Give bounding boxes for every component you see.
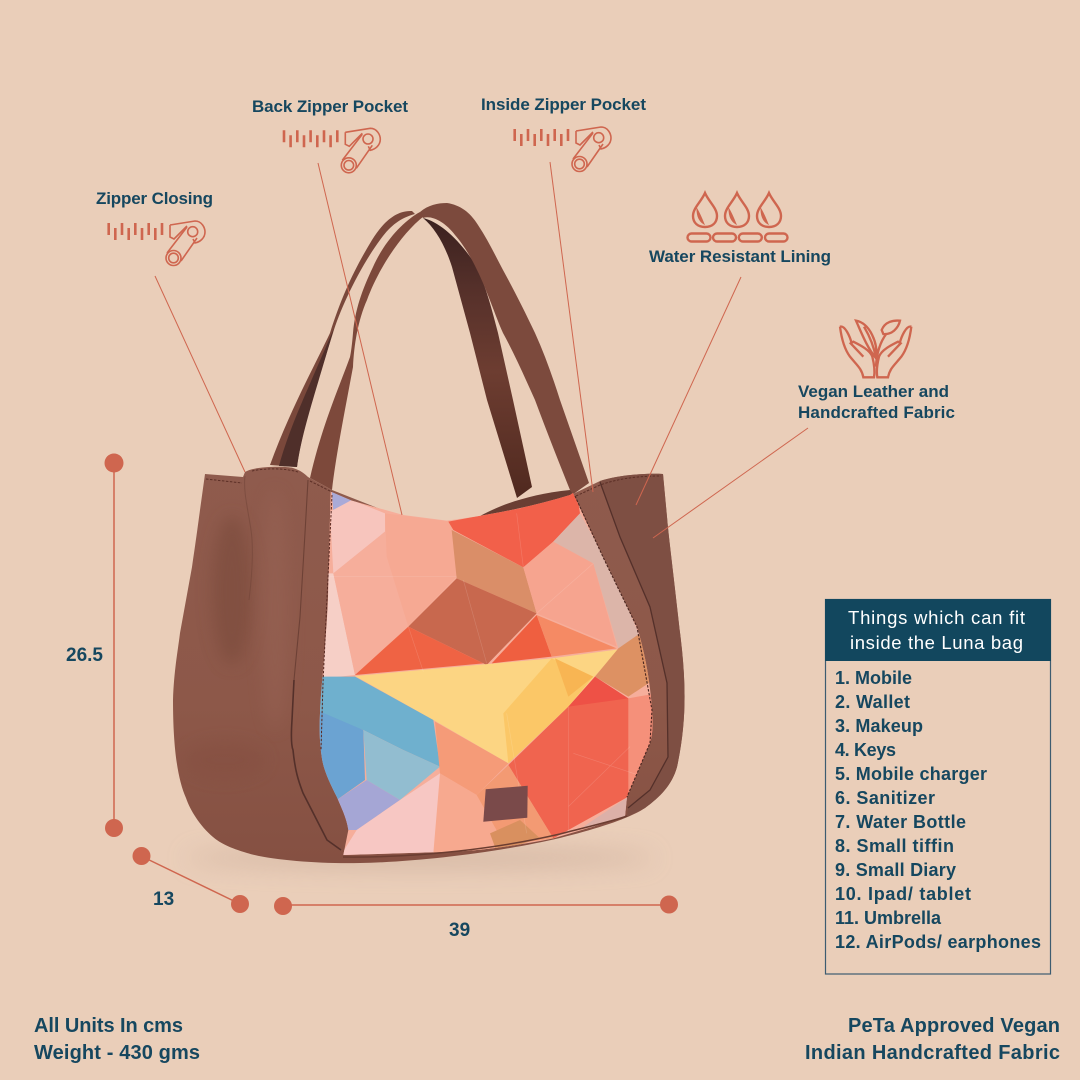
top stitches [206, 469, 661, 496]
label: vegan leather and handcrafted fabric: Vegan Leather and [798, 382, 949, 401]
callout line: zipper closing [155, 276, 245, 472]
left front strip lower seam [291, 680, 341, 850]
icon: hands holding plant [840, 321, 911, 377]
front right handle [420, 203, 589, 495]
label: water resistant lining: Water Resistant Lining [649, 247, 831, 266]
right fold seam [600, 482, 668, 808]
label: vegan leather and handcrafted fabric: Handcrafted Fabric [798, 403, 955, 422]
footer left: units and weight [34, 1015, 200, 1064]
brand patch [483, 786, 528, 822]
width dimension [274, 896, 678, 941]
bag bottom edge [343, 816, 627, 857]
icon: zipper closing [109, 221, 205, 266]
callout line: water resistant lining [636, 277, 741, 505]
list of items: 1. Mobile [835, 668, 912, 688]
list of items: 4. Keys [835, 740, 896, 760]
callout line: back zipper pocket [318, 163, 402, 515]
fabric thread lines [330, 513, 653, 833]
label: vegan leather and handcrafted fabric [798, 382, 955, 422]
footer right: certifications: Indian Handcrafted Fabric [805, 1042, 1060, 1064]
list of items [835, 668, 1041, 952]
icon: water drops [688, 193, 788, 242]
left gusset shading [212, 515, 252, 665]
footer right: certifications [805, 1015, 1060, 1064]
right fold panel [600, 474, 685, 817]
fabric edge stitches [321, 495, 332, 750]
height dimension [66, 454, 124, 837]
rear left handle inner shade [279, 328, 334, 467]
list of items: 7. Water Bottle [835, 812, 966, 832]
bag photo illustration [173, 203, 685, 868]
lit fold band [261, 490, 289, 730]
list of items: 8. Small tiffin [835, 836, 954, 856]
left fold crease [245, 476, 252, 600]
left front strip upper seam [294, 480, 308, 680]
footer left: units and weight: Weight - 430 gms [34, 1042, 200, 1064]
bag interior [480, 490, 575, 516]
list of items: 5. Mobile charger [835, 764, 987, 784]
footer right: certifications: PeTa Approved Vegan [848, 1015, 1060, 1037]
width value: 39 [449, 920, 470, 941]
back right handle [423, 218, 532, 498]
panel header [825, 599, 1051, 661]
depth dimension [132, 847, 249, 913]
panel heading text: Things which can fit [848, 607, 1025, 628]
callout line: vegan leather [653, 428, 808, 538]
right fabric edge stitches [575, 496, 652, 797]
footer left: units and weight: All Units In cms [34, 1015, 183, 1037]
fabric facets [317, 492, 657, 857]
list of items: 11. Umbrella [835, 908, 942, 928]
depth value: 13 [153, 889, 174, 910]
list of items: 3. Makeup [835, 716, 923, 736]
label: back zipper pocket: Back Zipper Pocket [252, 97, 408, 116]
list of items: 6. Sanitizer [835, 788, 935, 808]
floor shadow [185, 848, 655, 868]
label: inside zipper pocket: Inside Zipper Pocket [481, 95, 646, 114]
list of items: 2. Wallet [835, 692, 910, 712]
list of items: 9. Small Diary [835, 860, 956, 880]
fabric panel [313, 487, 660, 860]
bag body [173, 467, 685, 863]
panel heading text: inside the Luna bag [850, 632, 1023, 653]
list of items: 10. Ipad/ tablet [835, 884, 971, 904]
panel heading text [848, 607, 1025, 653]
callout line: inside zipper pocket [550, 162, 593, 492]
icon: inside zipper pocket [515, 127, 611, 172]
lower left bag shading [185, 742, 265, 778]
front left handle [310, 212, 424, 490]
label: zipper closing: Zipper Closing [96, 189, 213, 208]
height value: 26.5 [66, 645, 103, 666]
icon: back zipper pocket [284, 128, 380, 173]
list of items: 12. AirPods/ earphones [835, 932, 1041, 952]
panel: things which can fit [825, 599, 1051, 974]
rear left handle [270, 211, 415, 467]
